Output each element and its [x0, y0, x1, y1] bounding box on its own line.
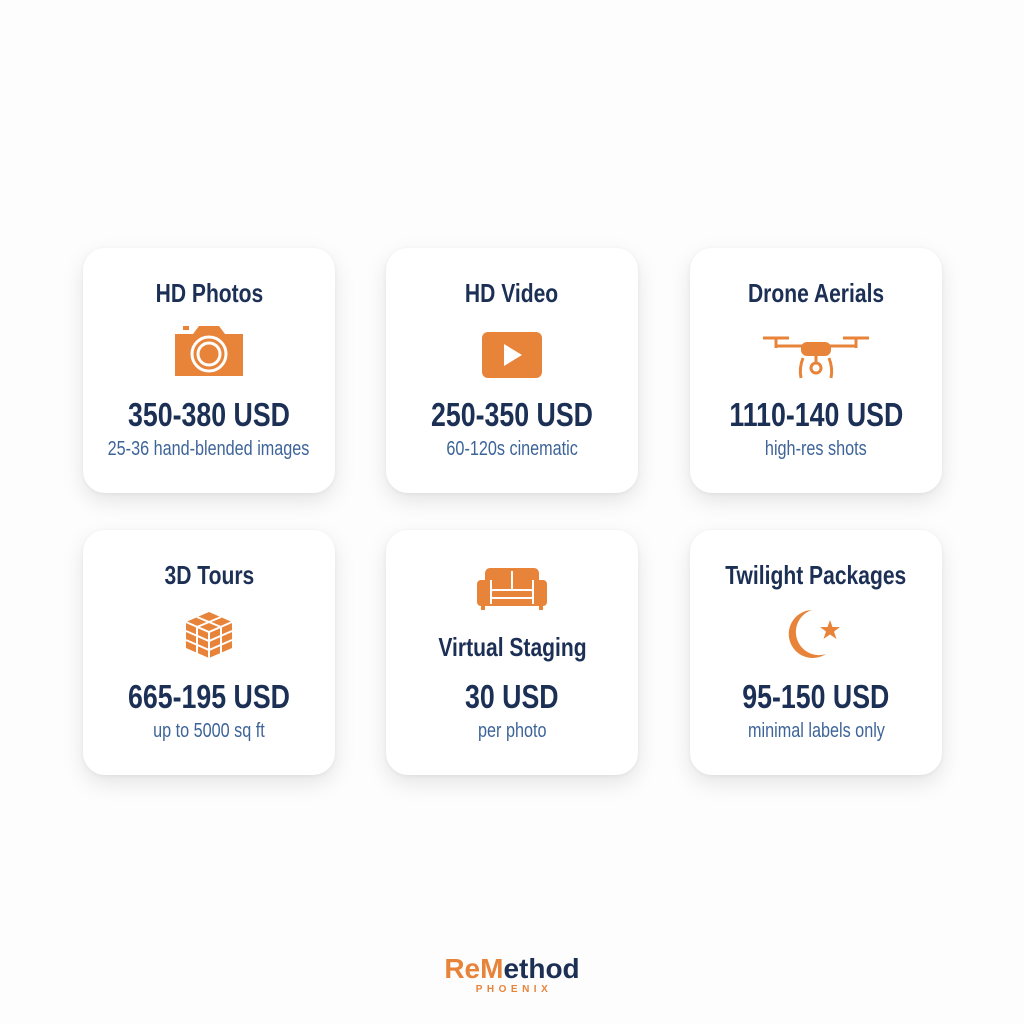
- logo: ReMethod: [444, 953, 580, 984]
- subtitle: 25-36 hand-blended images: [108, 438, 310, 460]
- heading: Twilight Packages: [725, 560, 907, 590]
- icon: moon and star: [788, 610, 840, 658]
- panel: Drone Aerials: [690, 248, 942, 493]
- panel: Twilight Packages: [690, 530, 942, 775]
- price: 1110-140 USD: [729, 396, 903, 433]
- icon: sofa: [477, 568, 547, 610]
- panel: HD Photos: [83, 248, 335, 493]
- icon: drone: [763, 336, 869, 378]
- price: 95-150 USD: [742, 678, 890, 715]
- panel: Virtual Staging: [386, 530, 638, 775]
- subtitle: up to 5000 sq ft: [153, 720, 265, 742]
- price: 350-380 USD: [128, 396, 290, 433]
- subtitle: per photo: [478, 720, 546, 742]
- panel: HD Video: [386, 248, 638, 493]
- price: 250-350 USD: [431, 396, 593, 433]
- heading: HD Video: [465, 278, 559, 308]
- price: 665-195 USD: [128, 678, 290, 715]
- panel: 3D Tours: [83, 530, 335, 775]
- heading: HD Photos: [155, 278, 263, 308]
- logo: PHOENIX: [476, 984, 552, 995]
- icon: play: [482, 332, 542, 378]
- heading: 3D Tours: [164, 560, 254, 590]
- subtitle: high-res shots: [765, 438, 867, 460]
- subtitle: minimal labels only: [748, 720, 884, 742]
- heading: Virtual Staging: [438, 632, 586, 662]
- icon: cube: [186, 612, 232, 658]
- heading: Drone Aerials: [748, 278, 884, 308]
- price: 30 USD: [465, 678, 559, 715]
- subtitle: 60-120s cinematic: [446, 438, 578, 460]
- icon: camera: [175, 326, 243, 376]
